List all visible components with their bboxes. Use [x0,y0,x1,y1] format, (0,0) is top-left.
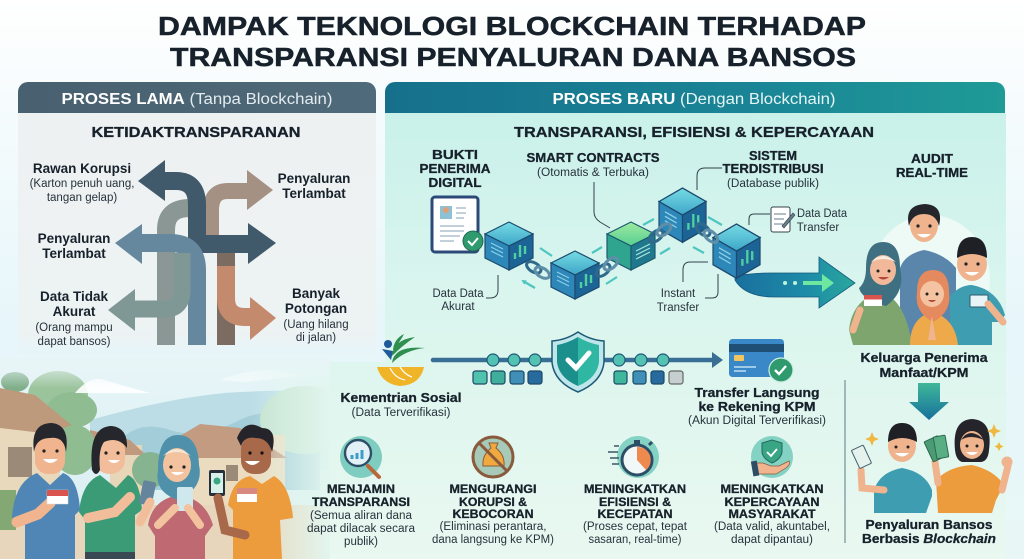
benefit: meningkatkan kepercayaan: dapat dipantau) [731,534,813,546]
benefit: mengurangi korupsi: KEBOCORAN [452,507,534,521]
label: transfer langsung: ke Rekening KPM [698,399,816,414]
tangled arrows [108,160,276,345]
sparkles [865,424,1004,451]
label: bukti penerima digital: BUKTI [432,148,478,162]
person: man in orange shirt [209,425,293,559]
icon: kementerian sosial logo [377,334,425,386]
benefit: menjamin transparansi: publik) [344,536,378,548]
icon: magnifier [340,436,382,478]
label: banyak potongan: di jalan) [296,332,336,344]
benefit: meningkatkan kepercayaan: MASYARAKAT [728,507,816,521]
label: penyaluran terlambat kiri: Penyaluran [38,231,110,246]
illustration: beneficiary family [849,204,1005,345]
label: kementrian sosial: (Data Terverifikasi) [352,407,451,419]
girl in orange hijab [910,270,958,345]
label: transfer langsung: Transfer Langsung [694,385,820,400]
panel: proses baru [330,82,1006,559]
benefit: mengurangi korupsi: KORUPSI & [459,495,527,509]
label: keluarga penerima manfaat: Manfaat/KPM [880,365,968,380]
label: audit real-time: REAL-TIME [896,166,968,180]
benefit: meningkatkan kepercayaan: MENINGKATKAN [720,482,824,496]
label: penyaluran terlambat kiri: Terlambat [42,246,106,261]
person: woman in hijab [148,435,213,559]
father [900,204,956,345]
benefit: meningkatkan efisiensi [583,436,688,546]
benefit: mengurangi korupsi: MENGURANGI [450,482,536,496]
label: data data akurat: Akurat [441,301,475,313]
benefit: meningkatkan efisiensi: EFISIENSI & [599,495,671,509]
label: penyaluran terlambat kiri [38,231,110,261]
benefit: menjamin transparansi: TRANSPARANSI [312,495,410,509]
big arrow [735,257,855,308]
heading: proses lama: PROSES LAMA (Tanpa Blockchain) [62,91,332,108]
label: keluarga penerima manfaat [860,350,988,380]
subheading: ketidaktransparanan: KETIDAKTRANSPARANAN [92,124,300,141]
label: kementrian sosial: Kementrian Sosial [340,390,462,405]
person: woman in green shirt [79,426,156,559]
benefit: mengurangi korupsi: (Eliminasi perantara, [440,521,546,533]
verified transfer line [433,352,723,384]
illustration: happy recipients [851,419,1012,513]
icon: document with pen [771,207,795,232]
panel: proses lama [18,82,376,363]
benefit: meningkatkan efisiensi: KECEPATAN [598,507,672,521]
title: DAMPAK TEKNOLOGI BLOCKCHAIN TERHADAP [158,11,866,41]
label: keluarga penerima manfaat: Keluarga Penerima [860,350,988,365]
label: data tidak akurat [35,289,113,348]
subheading: transparansi efisiensi kepercayaan: TRANSPARANSI, EFISIENSI & KEPERCAYAAN [514,124,874,141]
cube 3 green [607,222,655,270]
label: data data transfer: Data Data [797,208,848,220]
label: rawan korupsi: tangan gelap) [47,192,117,204]
label: banyak potongan: Banyak [292,286,341,301]
label: penyaluran bansos berbasis blockchain [862,517,996,546]
label: penyaluran terlambat kanan [278,171,350,201]
label: data data transfer: Transfer [797,222,839,234]
label: data data akurat [432,288,484,313]
benefit: meningkatkan kepercayaan: (Data valid, akuntabel, [714,521,830,533]
benefit: menjamin transparansi: (Semua aliran dana [310,510,413,522]
cube 2 [551,251,599,299]
benefit: meningkatkan efisiensi: sasaran, real-time) [588,534,682,546]
label: rawan korupsi: (Karton penuh uang, [30,178,134,190]
title [158,11,866,72]
icon: digital receipt document [431,197,483,252]
icon: crossed money bag [473,437,513,477]
benefit: menjamin transparansi [307,436,416,548]
benefit: menjamin transparansi: MENJAMIN [327,482,395,496]
boy with card [851,423,932,513]
icon: hand with shield [751,436,793,478]
benefit: menjamin transparansi: dapat dilacak secara [307,523,416,535]
label: data data akurat: Data Data [432,288,484,300]
benefit: mengurangi korupsi [432,437,554,546]
flow arrows [523,217,722,288]
illustration: village scene [0,358,350,559]
benefit: mengurangi korupsi: dana langsung ke KPM) [432,534,554,546]
label: penyaluran terlambat kanan: Penyaluran [278,171,350,186]
label: bukti penerima digital: DIGITAL [428,176,482,190]
label: smart contracts: SMART CONTRACTS [526,151,660,165]
label: kementrian sosial [340,390,462,419]
label: instant transfer: Transfer [657,302,699,314]
callout leader lines [486,168,770,298]
label: data tidak akurat: dapat bansos) [38,336,111,348]
label: bukti penerima digital [420,148,490,190]
cube 1 [485,222,533,270]
label: banyak potongan [283,286,349,344]
label: banyak potongan: Potongan [285,301,347,316]
icon: bank card [729,339,793,382]
blockchain network [485,168,855,308]
label: sistem terdistribusi [722,149,824,190]
label: banyak potongan: (Uang hilang [283,319,349,331]
person: man in blue shirt [12,423,80,559]
heading: proses baru: PROSES BARU (Dengan Blockchain) [552,91,836,108]
benefit: meningkatkan efisiensi: (Proses cepat, tepat [583,521,688,533]
label: rawan korupsi: Rawan Korupsi [33,161,131,176]
label: penyaluran bansos berbasis blockchain: Berbasis Blockchain [862,531,996,546]
label: transfer langsung: (Akun Digital Terverifikasi) [688,415,826,427]
label: instant transfer: Instant [661,288,696,300]
chain links [525,221,720,281]
label: penyaluran bansos berbasis blockchain: Penyaluran Bansos [866,517,992,532]
label: audit real-time [896,152,968,180]
benefit: meningkatkan efisiensi: MENINGKATKAN [584,482,686,496]
label: smart contracts: (Otomatis & Terbuka) [537,167,649,179]
label: data tidak akurat: Akurat [53,304,96,319]
label: sistem terdistribusi: TERDISTRIBUSI [722,162,824,176]
label: rawan korupsi [30,161,134,204]
cube 5 [713,224,760,278]
icon: security shield [552,332,604,392]
icon: stopwatch [608,436,659,478]
benefit: meningkatkan kepercayaan: KEPERCAYAAN [724,495,820,509]
girl with money [924,419,1012,513]
label: sistem terdistribusi: SISTEM [749,149,797,163]
label: data data transfer [797,208,848,234]
benefit: meningkatkan kepercayaan [714,436,830,546]
cube 4 [659,188,706,242]
label: transfer langsung [688,385,826,427]
label: bukti penerima digital: PENERIMA [420,162,490,176]
label: data tidak akurat: Data Tidak [40,289,109,304]
arrow: down [909,383,949,420]
label: audit real-time: AUDIT [911,152,953,166]
boy with cap [950,237,1005,345]
label: instant transfer [657,288,699,314]
label: smart contracts [526,151,660,179]
label: penyaluran terlambat kanan: Terlambat [282,186,346,201]
label: sistem terdistribusi: (Database publik) [727,178,819,190]
mother in hijab [849,242,912,345]
title: TRANSPARANSI PENYALURAN DANA BANSOS [170,42,856,72]
label: data tidak akurat: (Orang mampu [35,322,113,334]
